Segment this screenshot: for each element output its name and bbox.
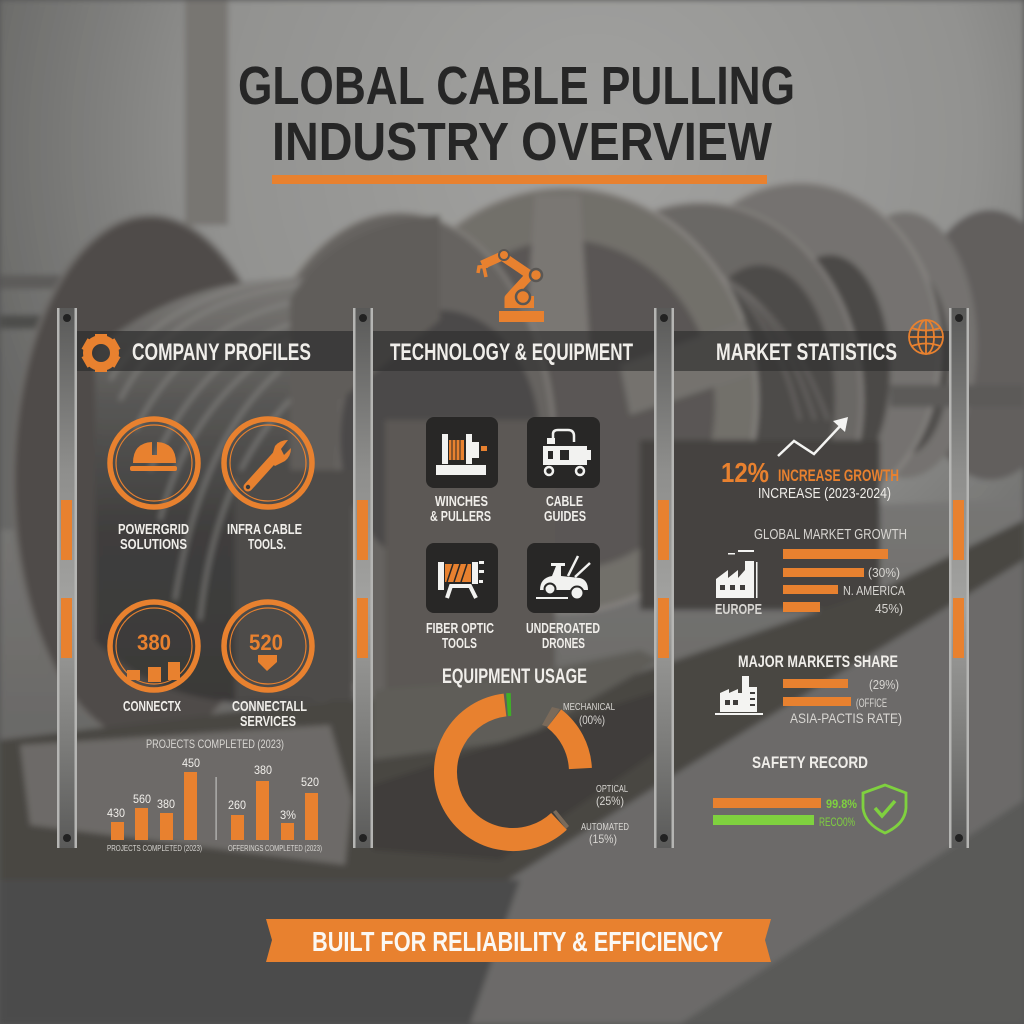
icon: drone vehicle — [527, 543, 600, 613]
bar chart: projects right: 520 — [301, 775, 319, 789]
label: winches and pullers: WINCHES — [435, 493, 488, 510]
label: fiber optic tools: FIBER OPTIC — [426, 620, 494, 637]
label: europe: EUROPE — [715, 601, 762, 618]
bar chart: projects right: OFFERINGS COMPLETED (2023) — [228, 844, 322, 853]
label: underoated drones: UNDEROATED — [526, 620, 600, 637]
stat: 12 percent growth — [721, 457, 899, 502]
title: GLOBAL CABLE PULLING — [238, 56, 795, 116]
donut legend: (15%) — [589, 832, 617, 846]
bar chart: projects right — [228, 763, 322, 853]
label: connectall services: CONNECTALL — [232, 698, 307, 715]
heading: major markets share: MAJOR MARKETS SHARE — [738, 652, 898, 671]
label: powergrid solutions: POWERGRID — [118, 521, 189, 538]
label: cable guides: GUIDES — [544, 508, 586, 525]
bar chart: projects right: 3% — [280, 808, 296, 822]
bar chart: projects left: 560 — [133, 792, 151, 806]
stat: 12 percent growth: 12% — [721, 457, 769, 488]
donut legend — [563, 701, 629, 846]
panel: company profiles — [82, 334, 322, 853]
bar chart: regional growth — [783, 549, 905, 616]
icon: gear — [82, 334, 120, 372]
label: connectall services — [232, 698, 307, 730]
badge: 520 — [224, 602, 312, 690]
icon: growth arrow — [778, 417, 848, 456]
bar chart: projects right: 380 — [254, 763, 272, 777]
heading: safety record: SAFETY RECORD — [752, 753, 868, 772]
heading: global market growth: GLOBAL MARKET GROWTH — [754, 526, 907, 543]
donut legend: AUTOMATED — [581, 821, 629, 833]
bar chart: safety record: RECO0% — [819, 815, 855, 829]
label: connectall services: SERVICES — [240, 713, 296, 730]
heading: market statistics: MARKET STATISTICS — [716, 339, 897, 366]
badge: 380 — [110, 602, 198, 690]
icon: safety shield — [863, 785, 906, 833]
badge: hard hat — [110, 419, 198, 507]
label: infra cable tools: INFRA CABLE — [227, 521, 302, 538]
bar chart: projects left: 380 — [157, 797, 175, 811]
label: connectx: CONNECTX — [123, 698, 181, 715]
title underline — [272, 175, 767, 184]
post 3 — [654, 308, 674, 848]
title — [238, 56, 795, 172]
icon: winch — [426, 417, 498, 488]
icon: cable guide machine — [527, 417, 600, 488]
donut legend: (00%) — [579, 713, 605, 727]
label: fiber optic tools: TOOLS — [442, 635, 477, 652]
post 2 — [353, 308, 373, 848]
donut legend: (25%) — [596, 794, 624, 808]
bar chart: market share — [783, 677, 902, 726]
label: infra cable tools — [227, 521, 302, 553]
bar chart: projects left: PROJECTS COMPLETED (2023) — [107, 844, 202, 853]
section header bands — [76, 331, 949, 371]
bar chart: market share: ASIA-PACTIS RATE) — [790, 710, 902, 726]
panel: market statistics — [713, 320, 943, 833]
label: underoated drones — [526, 620, 600, 652]
banner: BUILT FOR RELIABILITY & EFFICIENCY — [312, 926, 723, 957]
label: underoated drones: DRONES — [542, 635, 585, 652]
post 4 — [949, 308, 969, 848]
label: powergrid solutions — [118, 521, 189, 553]
icon: robot arm — [478, 250, 544, 322]
icon: fiber optic tool — [426, 543, 498, 613]
bar chart: market share: (29%) — [869, 677, 899, 692]
heading: technology and equipment: TECHNOLOGY & EQUIPMENT — [390, 339, 633, 366]
post 1 — [57, 308, 77, 848]
bar chart: projects right: 260 — [228, 798, 246, 812]
badge: wrench — [224, 419, 312, 507]
bar chart: projects left — [107, 756, 202, 853]
label: cable guides — [544, 493, 586, 525]
badge: 380: 380 — [137, 630, 171, 655]
bar chart: projects left: 450 — [182, 756, 200, 770]
label: fiber optic tools — [426, 620, 494, 652]
panel: technology and equipment — [390, 250, 633, 846]
bar chart: projects left: 430 — [107, 806, 125, 820]
bar chart: safety record — [713, 797, 857, 829]
donut legend: OPTICAL — [596, 783, 628, 795]
label: winches and pullers: & PULLERS — [430, 508, 491, 525]
bar chart: market share: (OFFICE — [856, 696, 887, 710]
stat: 12 percent growth: INCREASE (2023-2024) — [758, 485, 891, 502]
icon: globe — [909, 320, 943, 354]
bar chart: regional growth: N. AMERICA — [843, 583, 905, 598]
donut legend: MECHANICAL — [563, 701, 615, 713]
bar chart: regional growth: (30%) — [868, 565, 900, 580]
heading: equipment usage: EQUIPMENT USAGE — [442, 665, 587, 688]
label: winches and pullers — [430, 493, 491, 525]
stat: 12 percent growth: INCREASE GROWTH — [778, 466, 899, 485]
icon: factory — [716, 550, 758, 598]
title: INDUSTRY OVERVIEW — [272, 112, 772, 172]
heading: company profiles: COMPANY PROFILES — [132, 339, 311, 366]
label: powergrid solutions: SOLUTIONS — [120, 536, 187, 553]
icon: factory building — [715, 676, 763, 715]
label: infra cable tools: TOOLS. — [248, 536, 286, 553]
bar chart: safety record: 99.8% — [826, 797, 857, 811]
badge: 520: 520 — [249, 630, 283, 655]
banner — [266, 919, 771, 962]
bar chart: regional growth: 45%) — [875, 601, 903, 616]
label: cable guides: CABLE — [546, 493, 583, 510]
donut chart: equipment usage — [445, 704, 580, 840]
chart title: projects completed: PROJECTS COMPLETED (2023) — [146, 737, 284, 751]
